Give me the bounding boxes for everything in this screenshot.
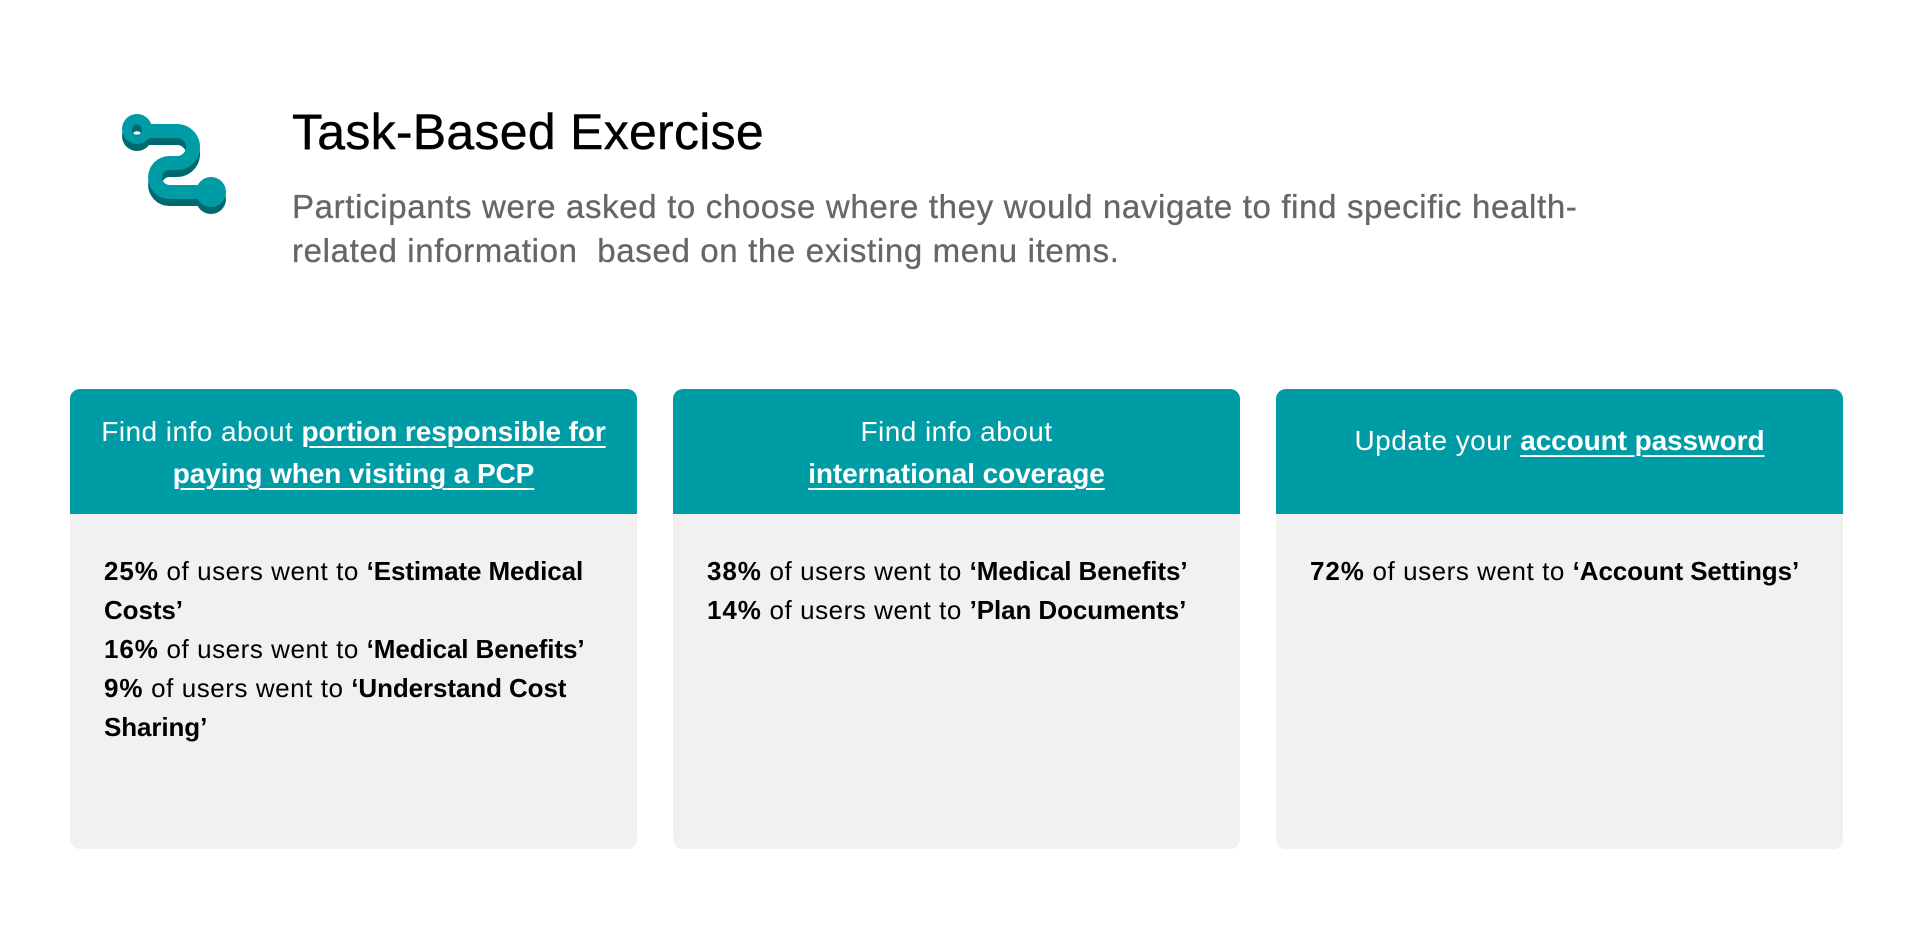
icon: winding path — [122, 114, 226, 214]
panel results: international coverage: 38% of users went to ‘Medical Benefits’ — [707, 556, 1187, 586]
intro text: related information based on the existing menu items. — [292, 232, 1120, 269]
panel results: portion responsible: Sharing’ — [104, 712, 207, 742]
panel: portion responsible — [70, 389, 637, 849]
panel results: portion responsible: 9% of users went to ‘Understand Cost — [104, 673, 566, 703]
panel results: portion responsible: 25% of users went to ‘Estimate Medical — [104, 556, 583, 586]
panel header: account password: Update your account password — [1355, 425, 1764, 456]
panel header: portion responsible: paying when visiting a PCP — [173, 458, 534, 489]
panel results: portion responsible: Costs’ — [104, 595, 183, 625]
title: Task-Based Exercise — [292, 104, 764, 160]
panel results: account password: 72% of users went to ‘Account Settings’ — [1310, 556, 1799, 586]
panel results: portion responsible — [104, 556, 584, 742]
panel header: portion responsible: Find info about portion responsible for — [101, 416, 606, 447]
panel header: portion responsible — [70, 389, 637, 514]
intro text: Participants were asked to choose where they would navigate to find specific health- — [292, 188, 1577, 225]
panel header: international coverage: Find info about — [860, 416, 1052, 447]
panel results: international coverage: 14% of users went to ’Plan Documents’ — [707, 595, 1186, 625]
panel: account password — [1276, 389, 1843, 849]
panel results: portion responsible: 16% of users went to ‘Medical Benefits’ — [104, 634, 584, 664]
panel results: international coverage — [707, 556, 1187, 625]
panel header: international coverage: international coverage — [808, 458, 1105, 489]
panel header: international coverage — [673, 389, 1240, 514]
intro text — [292, 188, 1577, 270]
panel: international coverage — [673, 389, 1240, 849]
panel header: account password — [1276, 389, 1843, 514]
